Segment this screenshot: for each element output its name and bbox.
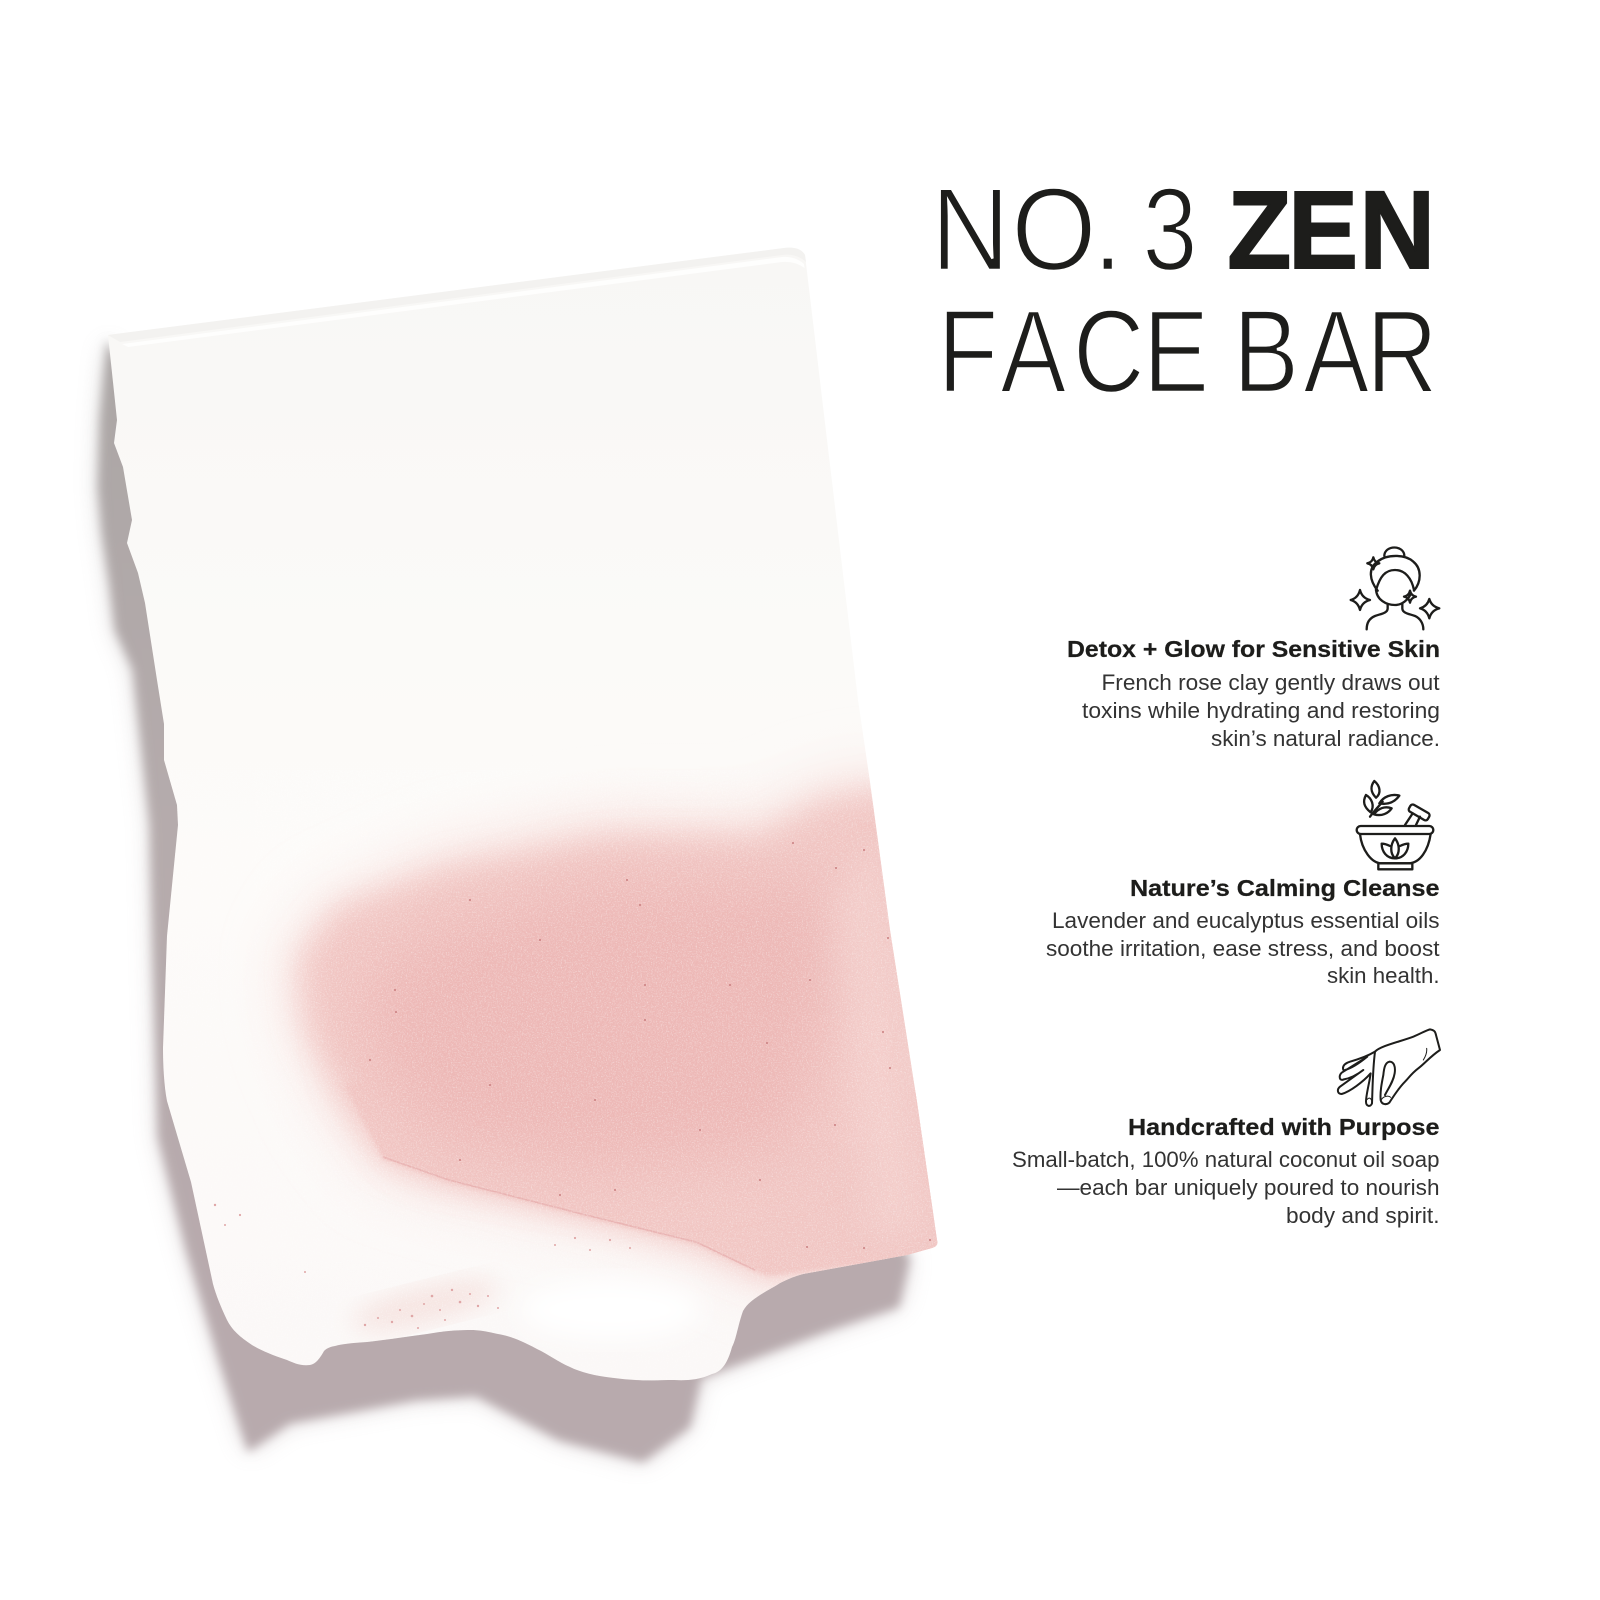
title line 1: NO. <box>931 164 1123 296</box>
description: French rose clay gently draws out <box>1102 670 1440 695</box>
title line 2: FACE BAR <box>938 286 1438 418</box>
description: soothe irritation, ease stress, and boost <box>1046 936 1440 961</box>
foam rose speckle <box>214 1204 631 1329</box>
description: body and spirit. <box>1286 1203 1440 1228</box>
soap blotches <box>390 898 800 1238</box>
description: skin health. <box>1327 963 1440 988</box>
soap bar photo <box>98 240 950 1462</box>
heading: Handcrafted with Purpose <box>1128 1114 1440 1140</box>
description <box>1012 1147 1440 1228</box>
foam blush <box>358 1276 493 1334</box>
title line 1: 3 <box>1142 164 1198 296</box>
heading: Detox + Glow for Sensitive Skin <box>1067 636 1440 662</box>
clay edge line <box>383 1157 755 1270</box>
description: Lavender and eucalyptus essential oils <box>1052 908 1440 933</box>
heading: Nature’s Calming Cleanse <box>1130 875 1440 901</box>
icon: face with sparkles <box>1351 547 1439 629</box>
foam highlights <box>594 1298 662 1316</box>
rose clay layer <box>300 785 950 1276</box>
icon: hand <box>1338 1029 1440 1106</box>
top bevel <box>108 248 806 342</box>
description: —each bar uniquely poured to nourish <box>1057 1175 1440 1200</box>
soap body <box>100 240 950 1390</box>
description: Small-batch, 100% natural coconut oil soap <box>1012 1147 1440 1172</box>
title line 1: ZEN <box>1227 169 1435 292</box>
title <box>931 164 1438 418</box>
description: toxins while hydrating and restoring <box>1082 698 1440 723</box>
benefit 1: detox and glow <box>1067 547 1440 751</box>
clay blush haze <box>285 770 950 1285</box>
icon: mortar, pestle and herbs <box>1357 781 1433 869</box>
clay specks <box>369 842 936 1249</box>
description: skin’s natural radiance. <box>1211 726 1440 751</box>
description <box>1046 908 1440 988</box>
clay lower edge <box>364 1094 938 1276</box>
bevel highlight <box>122 257 804 347</box>
description <box>1082 670 1440 751</box>
benefit 2: calming cleanse <box>1046 781 1440 988</box>
soap grain <box>288 780 937 1286</box>
clay darker centre <box>360 880 830 1170</box>
soap cast shadow <box>98 340 910 1462</box>
pale band along right edge <box>830 840 925 1240</box>
benefit 3: handcrafted <box>1012 1029 1440 1228</box>
title line 1 <box>931 164 1435 296</box>
